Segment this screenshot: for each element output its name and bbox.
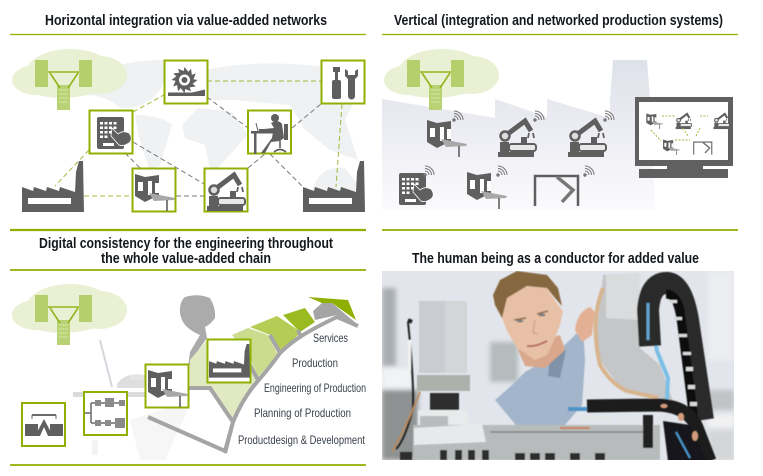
cloud: vertical [384,49,499,110]
network connections [55,81,342,196]
factory right [303,161,365,212]
title: digital consistency [39,235,333,267]
person at laptop silhouette [73,295,215,460]
title: horizontal integration: Horizontal integration via value-added networks [45,12,327,29]
factory left [22,161,84,212]
machines and robots [399,111,614,209]
value chain arrow [148,297,358,453]
box: flow diagram [84,392,127,435]
panel: vertical integration [382,12,738,230]
photo: engineer at machine [382,271,734,460]
title: digital consistency: the whole value-added chain [101,250,271,267]
factory backdrop [382,60,655,210]
box: saw [164,60,208,104]
box: machine [146,364,188,408]
chain labels: Services [313,331,348,345]
box: robot [204,168,248,212]
chain labels: Engineering of Production [264,381,366,395]
title: human being: The human being as a conductor for added value [412,250,699,267]
title: digital consistency: Digital consistency for the engineering throughout [39,235,333,252]
box: tablet [90,110,132,154]
world map [85,60,360,205]
box: tools [322,60,364,104]
chain labels [238,331,366,447]
monitor [635,97,733,178]
box: person at desk [248,110,291,154]
panel: horizontal integration [10,12,366,230]
box: factory [208,340,250,382]
chain labels: Production [292,356,338,370]
chain labels: Productdesign & Development [238,433,366,447]
chain labels: Planning of Production [254,406,351,420]
box: car [22,403,65,446]
panel: human being [382,250,734,461]
box: machine [132,168,176,212]
cloud: engineering [12,284,127,345]
panel: digital consistency [10,230,366,465]
cloud: horizontal [12,49,127,110]
